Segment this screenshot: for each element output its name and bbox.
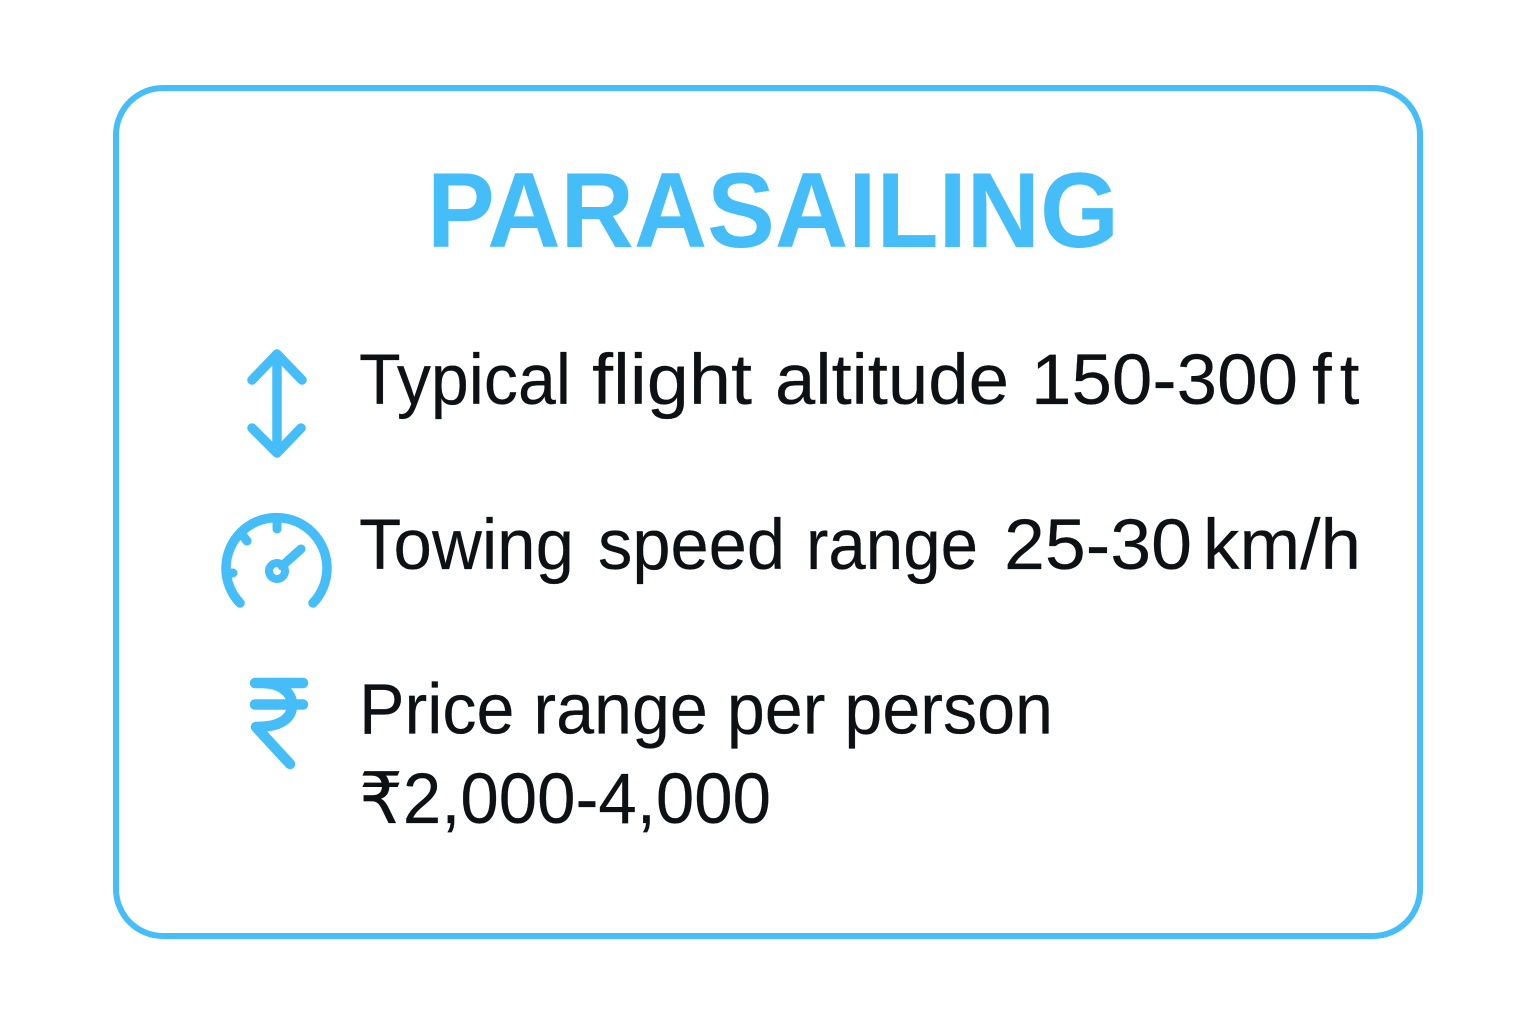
text: towing speed: Towing [359,506,574,585]
text: towing speed: range [806,506,978,585]
panel: parasailing card [113,85,1423,939]
text: flight altitude: flight [592,341,752,420]
text: price range: Price range per person [359,670,1053,750]
text: towing speed [359,506,1361,585]
text: flight altitude [359,341,1367,420]
icon: speedometer [221,512,332,608]
text: flight altitude: altitude [775,341,1009,420]
icon: altitude arrows [247,349,307,458]
text: flight altitude: Typical [359,341,571,420]
text: flight altitude: 150-300 [1031,341,1298,420]
text: towing speed: speed [598,506,785,585]
text: price value: ₹2,000-4,000 [359,760,771,839]
title: PARASAILING [427,150,1119,270]
icon: rupee [250,678,308,770]
text: flight altitude: ft [1312,341,1367,420]
text: towing speed: km/h [1203,506,1361,585]
text: towing speed: 25-30 [1004,506,1192,585]
